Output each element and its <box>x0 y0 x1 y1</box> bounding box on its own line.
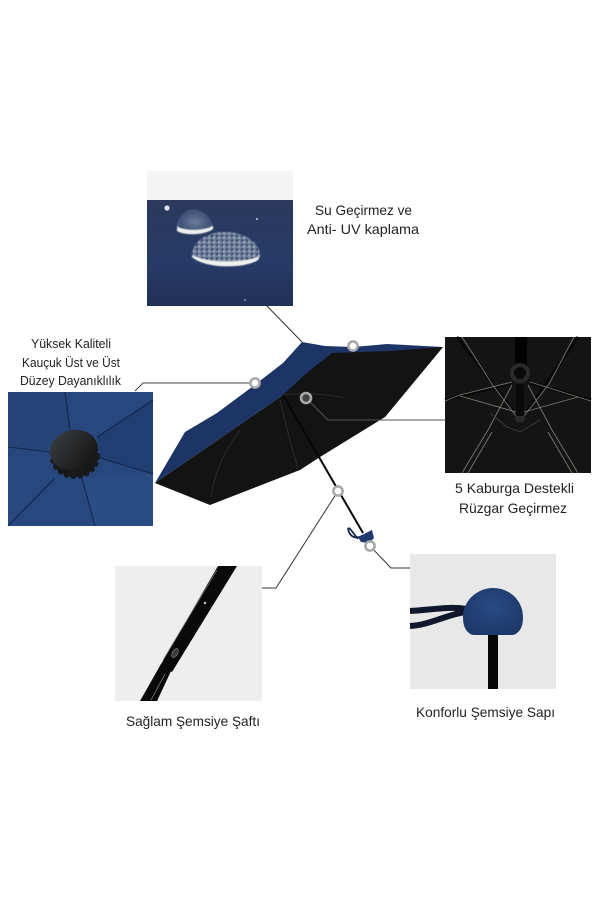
leader lines <box>135 306 446 588</box>
heading: waterproof label: Su Geçirmez ve <box>315 202 412 218</box>
heading: waterproof label: Anti- UV kaplama <box>307 221 419 237</box>
heading: rubber top label: Düzey Dayanıklılık <box>20 374 122 388</box>
heading: shaft label: Sağlam Şemsiye Şaftı <box>126 713 260 729</box>
panel: waterproof photo <box>147 171 293 306</box>
panel: umbrella ribs photo <box>445 337 591 473</box>
icon: handle dome <box>463 588 523 635</box>
icon: rubber cap <box>46 424 102 477</box>
heading: handle label: Konforlu Şemsiye Sapı <box>416 704 555 720</box>
heading: rubber top label: Kauçuk Üst ve Üst <box>22 356 120 370</box>
umbrella canopy outer navy <box>155 342 443 483</box>
icon: small water drop <box>177 210 213 234</box>
heading: rubber top label: Yüksek Kaliteli <box>31 337 111 351</box>
icon: wrist cord <box>410 608 466 626</box>
heading: ribs label: 5 Kaburga Destekli <box>455 480 574 496</box>
icon: large water drop <box>192 232 260 266</box>
heading: ribs label: Rüzgar Geçirmez <box>459 500 567 516</box>
umbrella shaft <box>283 395 363 533</box>
panel: rubber top photo <box>8 392 153 526</box>
umbrella canopy underside black <box>155 347 443 505</box>
panel: handle photo <box>410 554 556 689</box>
heading: rubber top label <box>20 337 122 388</box>
icon: umbrella handle <box>348 528 374 543</box>
callout markers <box>250 341 375 551</box>
heading: waterproof label <box>307 202 419 237</box>
panel: shaft photo <box>115 566 262 701</box>
umbrella illustration <box>155 342 443 543</box>
heading: ribs label <box>455 480 574 516</box>
